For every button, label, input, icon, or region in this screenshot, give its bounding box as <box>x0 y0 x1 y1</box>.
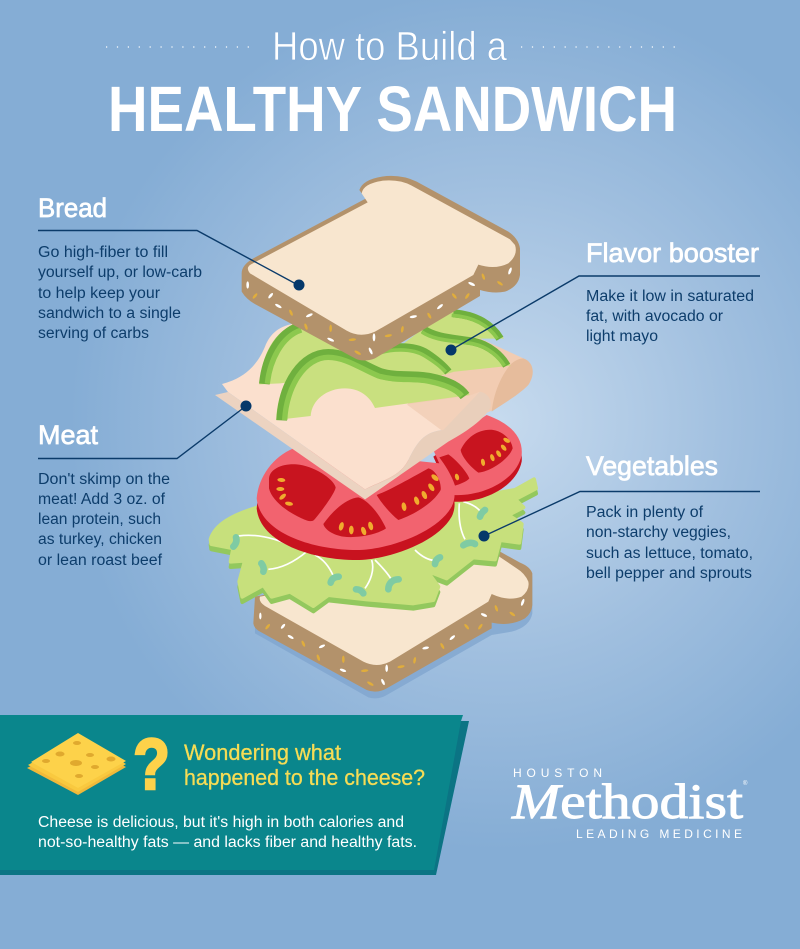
title: HEALTHY SANDWICH <box>108 73 677 145</box>
callout: vegetables <box>478 451 760 582</box>
back left avocado <box>259 324 453 384</box>
callout: bread: serving of carbs <box>38 325 149 342</box>
cheese heading: Wondering what <box>184 740 342 765</box>
cheese text: not-so-healthy fats — and lacks fiber and healthy fats. <box>38 834 417 851</box>
logo: Houston Methodist: LEADING MEDICINE <box>576 827 742 841</box>
cheese text: Cheese is delicious, but it's high in both calories and <box>38 814 404 831</box>
callout: bread: Go high-fiber to fill <box>38 244 168 261</box>
sprouts and veins <box>233 502 485 593</box>
top bread <box>242 176 520 360</box>
callout: flavor booster: fat, with avocado or <box>586 308 723 325</box>
callout: vegetables: Pack in plenty of <box>586 504 704 521</box>
icon: cheese slices <box>27 733 126 795</box>
seeds <box>259 598 525 687</box>
callout: vegetables: Vegetables <box>586 451 718 481</box>
icon: question mark: ? <box>133 725 170 805</box>
bottom bread <box>253 551 532 698</box>
far avocado <box>417 310 504 339</box>
callout: meat <box>38 400 252 569</box>
callout: vegetables: non-starchy veggies, <box>586 524 731 541</box>
callout: meat: Don't skimp on the <box>38 471 170 488</box>
cheese text <box>38 814 417 851</box>
callout: flavor booster: Make it low in saturated <box>586 288 754 305</box>
callout: bread: to help keep your <box>38 285 160 302</box>
logo: Houston Methodist <box>511 766 748 841</box>
callout: meat: meat! Add 3 oz. of <box>38 491 166 508</box>
meat slices <box>215 323 533 499</box>
callout: vegetables: bell pepper and sprouts <box>586 565 752 582</box>
callout: bread: sandwich to a single <box>38 305 181 322</box>
callout: bread <box>38 193 304 342</box>
crust seeds <box>246 267 513 356</box>
logo: Houston Methodist: Methodist <box>511 773 743 829</box>
sandwich illustration <box>211 176 536 698</box>
callout: meat: as turkey, chicken <box>38 531 162 548</box>
logo: Houston Methodist: HOUSTON <box>513 766 602 780</box>
tomato slices <box>257 415 522 560</box>
title <box>106 23 677 145</box>
front avocado <box>276 349 470 420</box>
title: How to Build a <box>272 23 507 69</box>
callout: flavor booster: Flavor booster <box>586 238 759 268</box>
lettuce <box>211 479 536 611</box>
avocado slices <box>259 310 511 420</box>
callout: flavor booster: light mayo <box>586 328 658 345</box>
callout: meat: Meat <box>38 420 98 450</box>
cheese heading <box>184 740 425 790</box>
callout: bread: yourself up, or low-carb <box>38 264 202 281</box>
callout: flavor booster <box>446 238 760 356</box>
tomato seeds <box>276 437 511 536</box>
right avocado <box>387 328 511 372</box>
callout: meat: lean protein, such <box>38 511 161 528</box>
panel: cheese banner <box>0 715 469 875</box>
logo: Houston Methodist: ® <box>743 780 748 787</box>
cheese heading: happened to the cheese? <box>184 765 425 790</box>
callout: bread: Bread <box>38 193 107 223</box>
callout: meat: or lean roast beef <box>38 552 163 569</box>
callout: vegetables: such as lettuce, tomato, <box>586 545 753 562</box>
